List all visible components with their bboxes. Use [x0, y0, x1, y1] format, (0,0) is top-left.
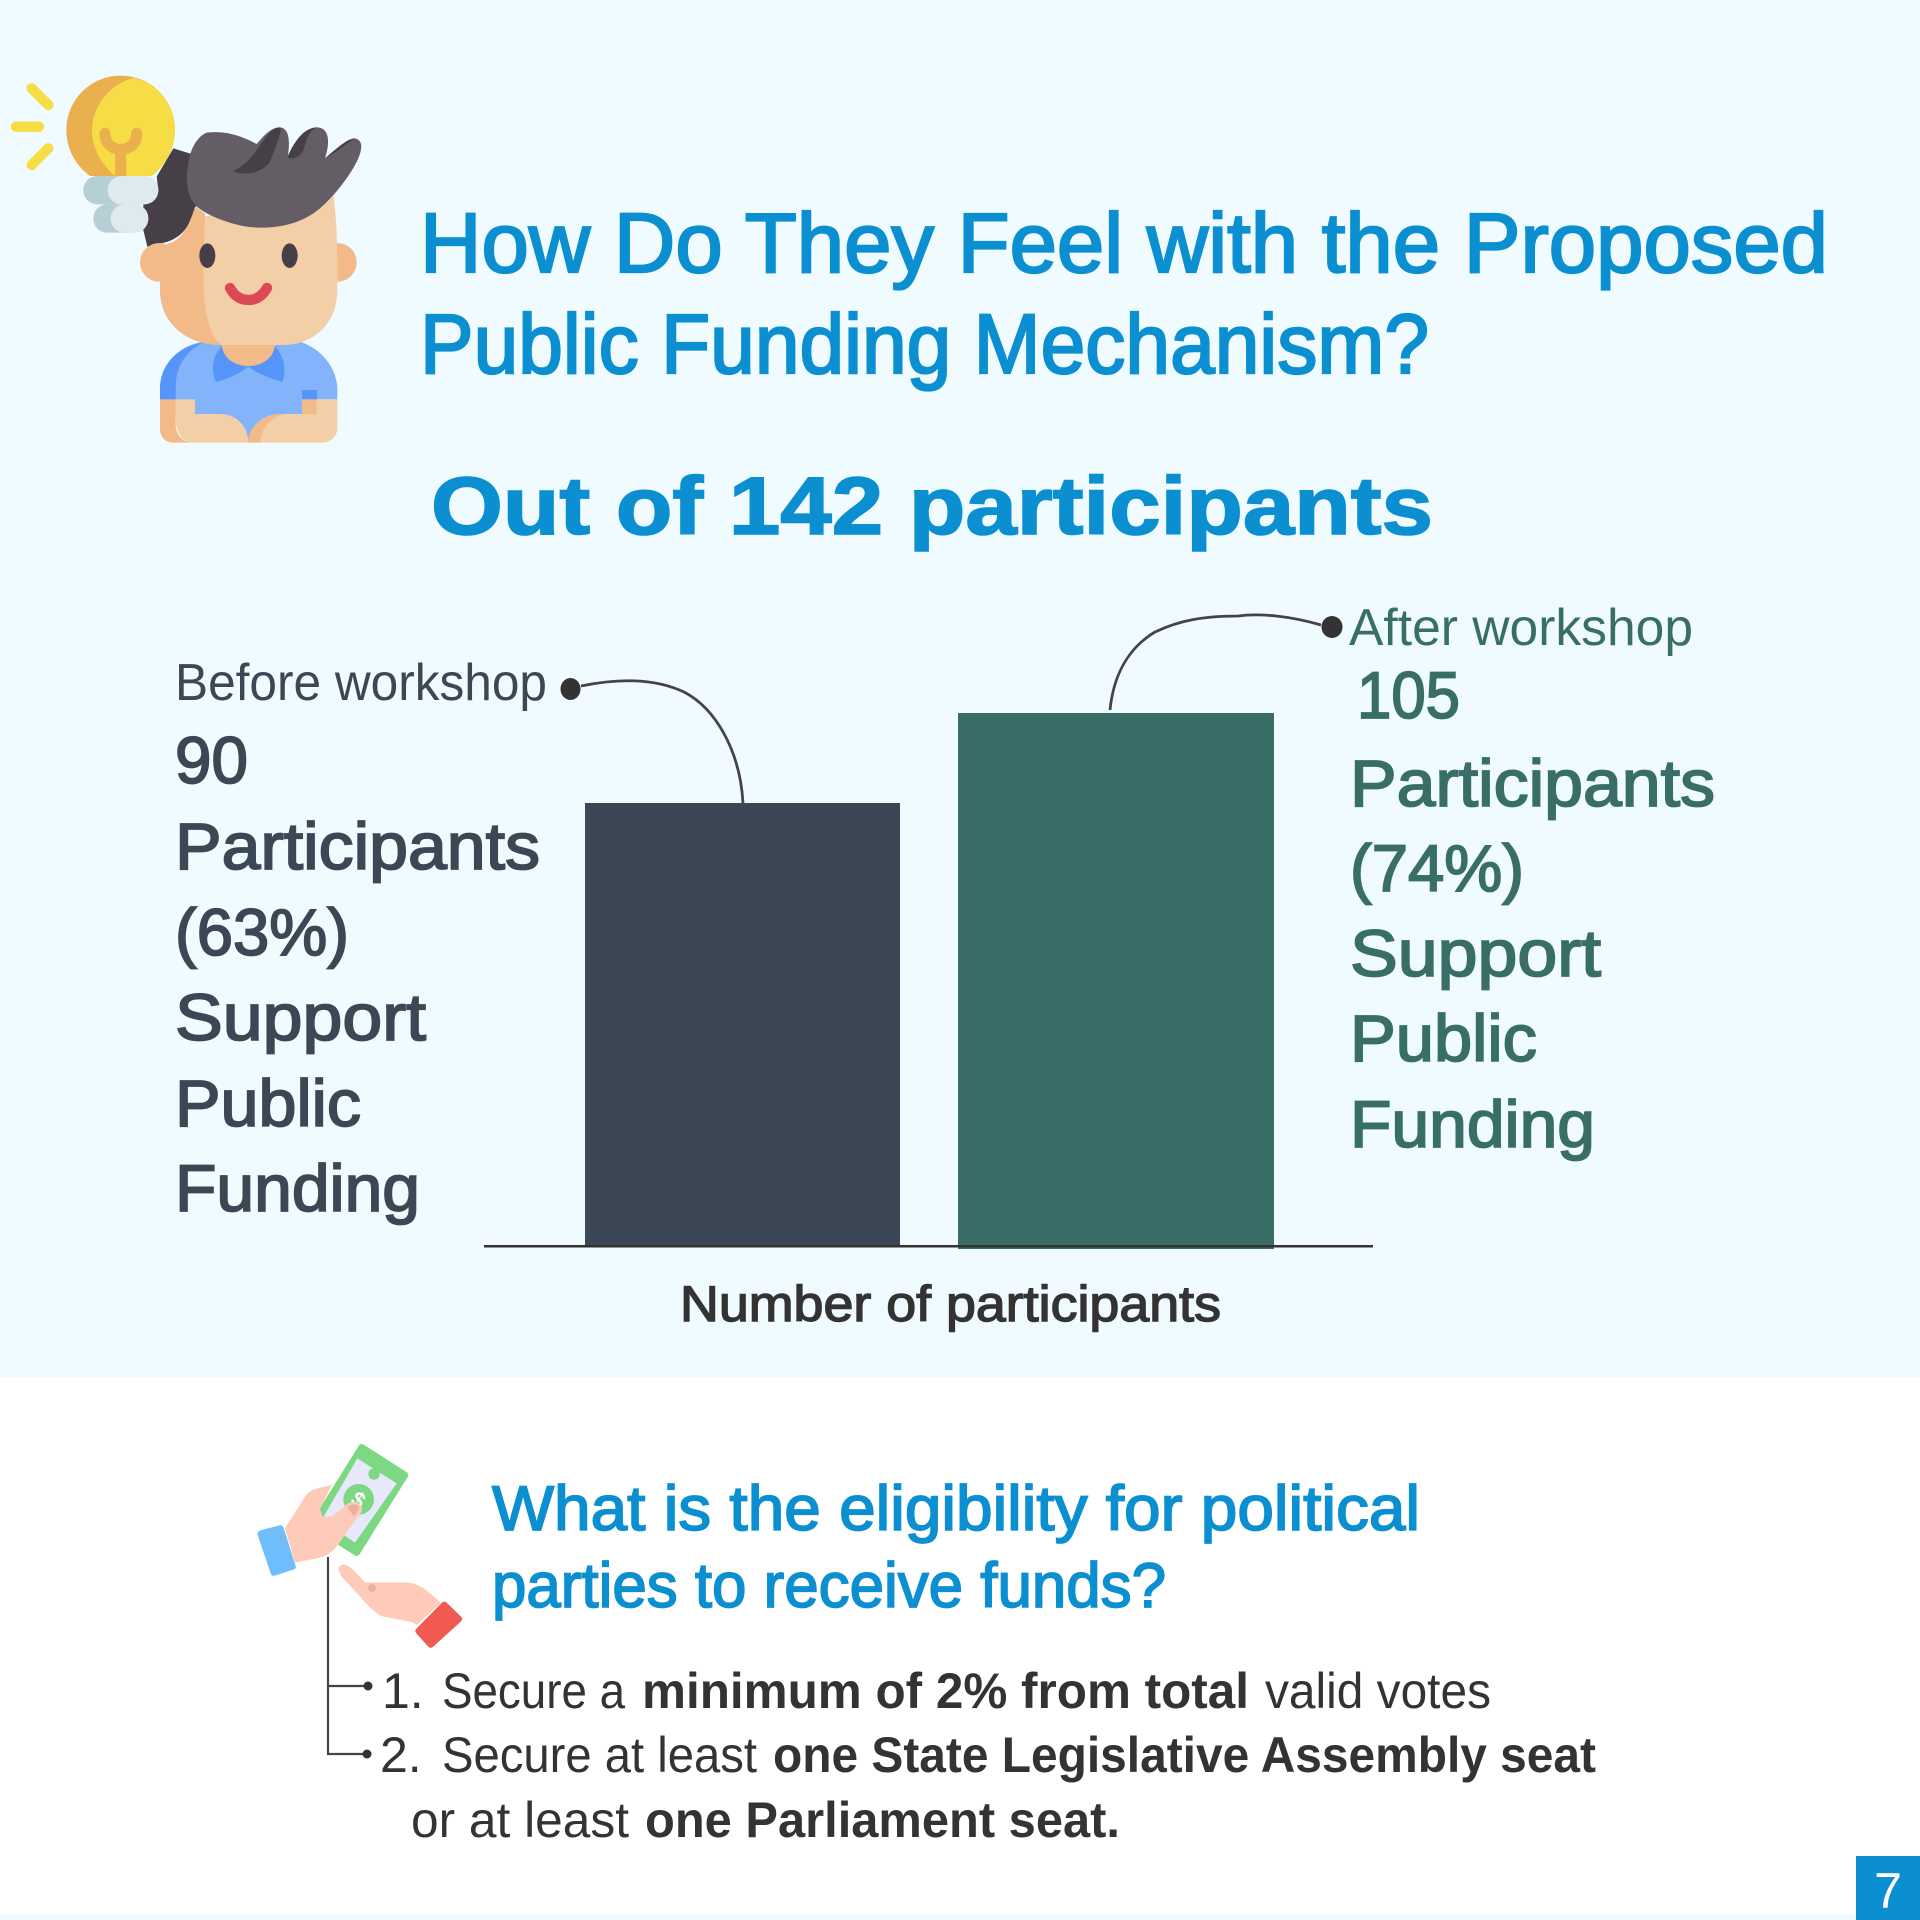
- icon: banknote: [313, 1447, 405, 1553]
- list item 2: Secure at least: [442, 1727, 757, 1783]
- face: [160, 193, 337, 345]
- text block: before workshop: Support: [175, 980, 426, 1054]
- list item 1: 1.: [382, 1663, 424, 1719]
- text block: after workshop: After workshop: [1349, 599, 1693, 657]
- text block: before workshop: [175, 654, 547, 1225]
- page number badge: [1856, 1856, 1920, 1920]
- text block: before workshop: Before workshop: [175, 654, 547, 712]
- text block: before workshop: Funding: [175, 1151, 420, 1225]
- list item 2: [380, 1727, 1596, 1848]
- text block: after workshop: Funding: [1350, 1087, 1595, 1161]
- text block: after workshop: Public: [1350, 1001, 1537, 1075]
- bar chart: [484, 713, 1373, 1332]
- panel: top background: [0, 0, 1920, 1377]
- list item 1: minimum of 2% from total: [642, 1663, 1249, 1719]
- page number badge: 7: [1874, 1863, 1902, 1919]
- footer strip: [0, 1915, 1920, 1920]
- list item 2: 2.: [380, 1727, 422, 1783]
- icon: hands exchanging money: [257, 1447, 462, 1648]
- bar: after workshop: [958, 713, 1274, 1249]
- list item 2: one State Legislative Assembly seat: [773, 1727, 1596, 1783]
- icon: light bulb: [66, 76, 175, 233]
- list item 2: one Parliament seat.: [645, 1792, 1120, 1848]
- text block: before workshop: Participants: [175, 809, 540, 883]
- title: Public Funding Mechanism?: [420, 297, 1429, 391]
- callout: before workshop connector: [560, 678, 743, 803]
- ears: [140, 243, 357, 282]
- neck and shirt: [160, 342, 337, 443]
- list item 2: or at least: [411, 1792, 629, 1848]
- subtitle: Out of 142 participants: [431, 461, 1433, 552]
- heading: eligibility question: parties to receive funds?: [492, 1551, 1166, 1621]
- list item 1: valid votes: [1265, 1663, 1491, 1719]
- callout: after workshop connector: [1110, 615, 1342, 710]
- text block: after workshop: Participants: [1350, 746, 1715, 820]
- text block: after workshop: 105: [1357, 658, 1460, 732]
- text block: after workshop: Support: [1350, 916, 1601, 990]
- icon: light rays: [16, 88, 48, 165]
- icon: man with light bulb: [16, 76, 361, 443]
- arms: [160, 399, 337, 443]
- title: [420, 196, 1828, 391]
- text block: after workshop: (74%): [1350, 831, 1524, 905]
- axis line: [484, 1245, 1373, 1248]
- title: How Do They Feel with the Proposed: [420, 196, 1828, 290]
- text block: before workshop: Public: [175, 1066, 361, 1140]
- panel: bottom white background: [0, 1377, 1920, 1915]
- icon: receiving hand: [338, 1565, 462, 1648]
- text block: after workshop: [1349, 599, 1715, 1161]
- list connector tree: [328, 1557, 372, 1758]
- back hair: [143, 148, 200, 247]
- front hair: [187, 127, 361, 228]
- text block: before workshop: (63%): [175, 895, 349, 969]
- list item 1: [382, 1663, 1491, 1719]
- list item 1: Secure a: [442, 1663, 625, 1719]
- axis label: Number of participants: [680, 1276, 1221, 1332]
- heading: eligibility question: [492, 1474, 1420, 1621]
- bar: before workshop: [585, 803, 900, 1246]
- icon: giving hand: [257, 1485, 362, 1576]
- icon: banknote: $: [347, 1486, 370, 1514]
- heading: eligibility question: What is the eligibility for political: [492, 1474, 1420, 1544]
- text block: before workshop: 90: [175, 723, 248, 797]
